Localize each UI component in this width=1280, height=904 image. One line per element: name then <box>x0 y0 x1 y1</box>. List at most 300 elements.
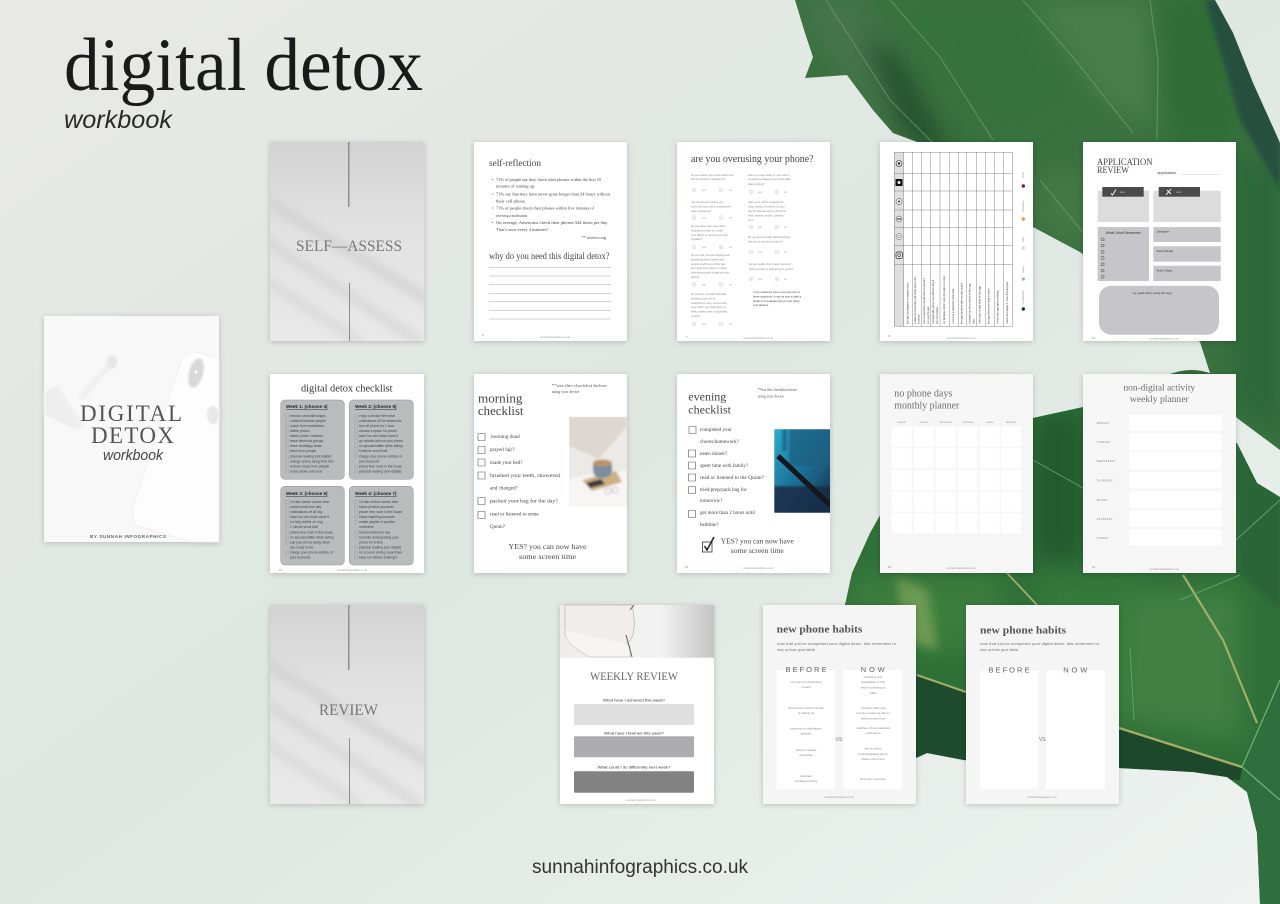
closing message: some screen time <box>519 552 577 561</box>
week 2 panel: charge your phone outside of <box>359 454 402 458</box>
questions left column: has the amount of time you <box>691 200 724 204</box>
obstacles box: Obstacles <box>1156 230 1170 234</box>
week 1 panel: leave facebook groups <box>290 439 324 443</box>
checklist items: completed your <box>700 427 732 433</box>
heading: no phone days <box>894 389 952 400</box>
option labels: yes <box>702 284 707 286</box>
application field: application <box>1157 170 1176 175</box>
footer: sunnahinfographics.co.uk <box>1027 795 1057 799</box>
questions left column: regularly? <box>691 237 703 241</box>
questions left column: interrupting other things you are <box>691 270 729 274</box>
panel: morning checklist page <box>474 374 632 573</box>
day labels: FRIDAY <box>1097 499 1108 502</box>
heading: morning <box>478 392 523 406</box>
week 3 panel <box>281 486 344 565</box>
heading: checklist <box>688 404 732 416</box>
now column: which is pleasing to <box>860 686 886 690</box>
questions left column: do you find yourself viewing and <box>691 253 730 257</box>
week 2 panel: 5-minute scroll limit <box>359 449 387 453</box>
panel: are you overusing your phone page <box>677 142 830 341</box>
week 4 panel: reminders <box>359 525 374 529</box>
checklist items: bedtime? <box>700 522 719 528</box>
day labels <box>897 421 1017 424</box>
panel: new phone habits filled <box>763 605 916 804</box>
week 4 panel: phone free room in the house <box>359 510 402 514</box>
now column: before screen time <box>861 716 885 720</box>
option labels: yes <box>702 323 707 326</box>
activity rows <box>1129 415 1222 546</box>
heading: WEEKLY REVIEW <box>590 669 679 683</box>
week 4 panel: consider downgrading your <box>359 536 399 540</box>
statistics list <box>492 177 611 240</box>
website footer: sunnahinfographics.co.uk <box>532 857 748 878</box>
questions right column: that you enter is obsessing its funds? <box>749 267 794 271</box>
week 4 panel: phone for a time <box>359 540 383 544</box>
page number: 10 <box>1092 336 1096 340</box>
now column: morning routine as well as <box>856 711 890 715</box>
footer: sunnahinfographics.co.uk <box>626 798 656 802</box>
panel: digital detox checklist page <box>270 374 424 573</box>
checklist items: packed your bag for the day? <box>490 498 559 504</box>
week 1 panel <box>281 400 344 479</box>
week 3 panel: social media free day <box>290 505 322 509</box>
advice note <box>753 290 802 307</box>
questions left column: checking your cell or <box>691 296 716 300</box>
option labels: no <box>729 246 732 249</box>
footer: sunnahinfographics.co.uk <box>1149 336 1179 340</box>
before column: unlimited <box>800 774 812 778</box>
question 3: What could I do differently next week? <box>598 766 671 770</box>
week 2 panel: physical reading (non-digital) <box>359 470 401 474</box>
now column: mindful to only <box>864 675 883 679</box>
heading: are you overusing your phone? <box>691 154 814 165</box>
question 1 <box>574 698 694 725</box>
week 3 panel: 1h ratio before screen time <box>290 500 329 504</box>
page number: 8 <box>888 334 890 338</box>
obstacles box <box>1153 227 1221 242</box>
icon: earbuds photo <box>45 355 117 430</box>
week 2 panel: your bedroom <box>359 460 380 464</box>
checkboxes <box>478 434 485 518</box>
week 2 panel: notifications off for weekends <box>359 419 402 423</box>
statement rows: it stops me connecting with those around me <box>914 276 917 324</box>
week 3 panel: notifications off all day <box>290 510 323 514</box>
week 2 panel: phone-free room in the house <box>359 464 402 468</box>
questions left column: your pillow, or next to your bed <box>691 233 728 237</box>
week 2 panel: no spouse/staffer while eating <box>359 444 403 448</box>
questions right column: place setting? <box>748 182 765 186</box>
option labels: no <box>784 226 787 229</box>
heading: evening <box>688 392 727 404</box>
before column <box>777 665 835 789</box>
panel: application review page <box>1083 142 1236 341</box>
week 4 panel: physical reading (non-digital) <box>359 546 401 550</box>
panel: self-reflection page <box>474 142 627 341</box>
checklist items: tomorrow? <box>700 498 723 504</box>
what I must remember box: What I Must Remember <box>1106 231 1142 235</box>
now column: areas in the home <box>861 757 885 761</box>
statement rows: i lose track of time while on this app <box>978 286 982 324</box>
option labels: yes <box>758 278 763 281</box>
start a break box <box>1153 246 1221 262</box>
statement rows: i struggle with going a day without using it <box>932 280 935 324</box>
week 2 panel: go outside without your phone <box>359 439 403 443</box>
footer: sunnahinfographics.co.uk <box>1149 567 1179 571</box>
statement rows: my behaviour when using this app is not ideal <box>943 275 946 324</box>
statement rows: this app interferes with my daily routine <box>960 282 964 324</box>
now column: notifications <box>865 731 881 735</box>
heading: SELF—ASSESS <box>296 238 402 255</box>
cover title: DIGITAL <box>80 401 182 426</box>
week 3 panel: 1 minute scroll limit <box>290 525 318 529</box>
checklist items <box>490 434 561 530</box>
checklist items: get more than 2 hours until <box>700 510 756 516</box>
panel: non-digital activity weekly planner <box>1083 374 1236 573</box>
closing message: YES? you can now have <box>508 542 587 551</box>
questions left column: even when you know there is <box>691 305 726 309</box>
versus label: VS <box>1039 737 1046 743</box>
intro text: keep up those good habits! <box>980 648 1018 652</box>
start a break box: Start a Break <box>1156 249 1173 253</box>
closing message <box>508 542 587 561</box>
heading: self-reflection <box>489 158 541 169</box>
now column <box>1046 666 1105 789</box>
questions left column: smartphone many times a day <box>691 301 728 305</box>
option labels: no <box>729 323 732 326</box>
questions left column: to see? <box>691 314 700 318</box>
questions right column: texts, tweets, emails, updates, <box>748 214 784 218</box>
cover credit: BY SUNNAH INFOGRAPHICS <box>90 534 166 539</box>
intro text: now that you've completed your digital detox, lets remember to <box>777 642 896 646</box>
before column: not scared of feel-testing <box>790 680 822 684</box>
day labels: SUNDAY <box>1097 537 1109 540</box>
week 3 panel: your bedroom <box>290 556 311 560</box>
checklist items: read or listened to some <box>490 512 539 518</box>
checklist items: read or listened to the Quran? <box>700 475 765 481</box>
photo: dried leaf <box>560 605 714 658</box>
photo: phone in blue light <box>774 429 830 513</box>
statement rows: i am not spending enough time on passions <box>923 277 926 324</box>
heading <box>688 392 732 416</box>
heading: new phone habits <box>980 625 1066 636</box>
week 2 panel: enjoy a device free meal <box>359 414 395 418</box>
questions right column: feel an intense urge to check for <box>748 209 786 213</box>
checklist items: tried/prep/pack bag for <box>700 486 747 493</box>
statistics list: 71% of people check their phones within five minutes of <box>496 206 595 210</box>
cons box: cons <box>1176 191 1182 194</box>
week 1 panel: block toxic people <box>290 449 316 453</box>
questions left column: emails at all hours of the day <box>691 262 726 266</box>
page number: 21 <box>1092 565 1096 569</box>
week 4 panel: follow positive accounts <box>359 505 394 509</box>
option labels: yes <box>758 226 763 229</box>
legend <box>1022 172 1025 311</box>
week 2 panel: Week 2: (choose 5) <box>355 404 397 409</box>
week 1 panel: physical reading (not digital) <box>290 454 331 458</box>
statistics list: On average, Americans check their phones 344 times per day. <box>496 220 608 226</box>
checklist items: Quran? <box>490 524 506 530</box>
panel: new phone habits blank <box>966 605 1119 804</box>
now column: switches off non-essential <box>856 726 890 730</box>
week 3 panel: no spouse/staffer while eating <box>290 536 334 540</box>
closing message: some screen time <box>731 547 784 555</box>
footer: sunnahinfographics.co.uk <box>946 566 976 570</box>
leaf: small tip above weekly planner <box>1165 370 1212 380</box>
legend: sometimes <box>1022 200 1025 212</box>
cover title <box>80 401 182 448</box>
questions right column: smartphone always part of the table <box>748 177 791 181</box>
before column: of waking up <box>798 711 815 715</box>
statement rows: i would be happier if i used this app less <box>1006 281 1009 324</box>
checklist items: made your bed? <box>490 460 523 466</box>
questions left column: been increasing? <box>691 209 712 213</box>
before column: content <box>801 685 811 689</box>
cover title: DETOX <box>91 423 174 448</box>
legend: never <box>1022 172 1025 178</box>
now column: watch/listen to that <box>861 680 885 684</box>
heading: weekly planner <box>1130 395 1189 405</box>
week 1 panel: Week 1: (choose 4) <box>286 404 328 409</box>
week 1 panel: unsub from newsletters <box>290 424 324 428</box>
goals box <box>1099 286 1219 335</box>
note: using your device <box>552 390 580 394</box>
action steps box: Action Steps <box>1156 268 1173 272</box>
subtitle: workbook <box>64 106 174 134</box>
checklist items: chores/homework? <box>700 439 739 445</box>
now column: zone/designated phone <box>858 752 888 756</box>
statement rows: and feel restless <box>936 306 939 324</box>
day labels: WEDNESDAY <box>1097 460 1116 463</box>
photo: coffee on bed <box>569 416 627 506</box>
day labels: WEDNESDAY <box>939 421 953 424</box>
pros box: pros <box>1120 190 1126 194</box>
checklist items <box>700 427 765 528</box>
footer: sunnahinfographics.co.uk <box>337 568 367 572</box>
calendar grid <box>892 427 1021 533</box>
page number: 20 <box>888 565 892 569</box>
option labels: yes <box>702 216 707 220</box>
week 4 panel: create playlist of positive <box>359 520 395 524</box>
day labels: THURSDAY <box>1097 480 1113 482</box>
week 1 panel: unfriend/unfollow people <box>290 419 326 423</box>
advice note: break or to evaluate how you are using <box>753 299 800 303</box>
now column: NOW <box>861 665 886 674</box>
icon: phone photo <box>132 352 219 542</box>
questions right column: when your cell or smartphone <box>748 200 784 204</box>
questions left column: do you text yourself habitually <box>691 292 727 296</box>
intro text <box>980 642 1099 652</box>
page number: 7 <box>686 335 688 339</box>
week 2 panel: turn off phone for 1 hour <box>359 424 395 428</box>
week 3 panel: have fun one-down-done it <box>290 515 329 519</box>
cover subtitle: workbook <box>103 447 164 464</box>
panel: evening checklist page <box>677 374 835 573</box>
week 1 panel: delete phone numbers <box>290 434 323 438</box>
legend: often <box>1022 236 1025 242</box>
footer: sunnahinfographics.co.uk <box>946 336 976 340</box>
questions left column: and night even when it means <box>691 266 727 270</box>
statement rows: this app affects my sleep or mood <box>988 288 990 324</box>
week 3 panel: phone free room in the house <box>290 530 333 534</box>
heading <box>894 389 960 411</box>
writing lines <box>489 267 611 319</box>
statement rows: i compare my life to others on this app <box>968 283 972 324</box>
questions left column: answering texts, tweets and <box>691 258 725 262</box>
week 2 panel: have fun one-down-done it <box>359 434 398 438</box>
option labels: no <box>729 216 732 220</box>
checklist items: and changed? <box>490 486 519 492</box>
questions right column <box>748 173 794 271</box>
statement rows <box>906 275 1009 324</box>
day labels: FRIDAY <box>986 421 994 424</box>
note <box>758 388 797 398</box>
before column: accessible <box>799 753 813 757</box>
week 4 panel: have fun without sharing it <box>359 556 397 560</box>
checklist items: prayed fajr? <box>490 446 515 453</box>
leaf: lower fiddle leaf <box>845 407 1280 904</box>
now column: complete dhikr and <box>861 706 886 710</box>
before column <box>980 666 1038 789</box>
now column: Everyone used less <box>860 777 886 781</box>
option labels: no <box>729 284 732 286</box>
heading: REVIEW <box>1097 165 1129 175</box>
leaf: upper fiddle leaf <box>795 0 1280 450</box>
footer: sunnahinfographics.co.uk <box>824 795 854 799</box>
statistics list: receiving a notification. <box>496 213 528 218</box>
page number: 16 <box>685 565 689 569</box>
before column: BEFORE <box>988 666 1030 674</box>
panel: weekly review page <box>560 605 714 804</box>
statistics list: • <box>492 192 494 196</box>
heading <box>478 392 524 418</box>
checklist items: eaten dinner? <box>700 451 728 457</box>
statistics list: That's once every 4 minutes! <box>496 227 548 232</box>
day labels: MONDAY <box>897 421 907 424</box>
day labels: MONDAY <box>1097 422 1110 425</box>
week 4 panel <box>349 486 413 565</box>
app icons <box>896 160 902 258</box>
statistics list: their cell phone. <box>496 198 526 204</box>
day labels <box>1097 422 1116 540</box>
before column: phone is always <box>796 748 817 752</box>
week 1 panel: remove uninstalled apps <box>290 414 326 418</box>
panel: no phone days monthly planner <box>880 374 1033 573</box>
legend: not applicable <box>1022 290 1025 305</box>
questions left column: doing? <box>691 275 700 279</box>
week 2 panel <box>349 400 413 479</box>
statement rows: i check this app without thinking <box>996 290 1000 324</box>
week 4 panel: social media free day <box>359 530 391 534</box>
week 3 panel: you come home <box>290 546 314 550</box>
pros box <box>1098 187 1149 222</box>
checklist items: spent time with family? <box>700 462 749 469</box>
questions right column: when you eat meals, is your cell or <box>748 173 789 177</box>
statement rows: in person <box>918 313 920 324</box>
questions left column <box>691 173 734 318</box>
questions right column: etc? <box>748 218 754 222</box>
heading: digital detox checklist <box>301 383 392 395</box>
question 2: What have I learned this week? <box>604 732 664 736</box>
note <box>552 384 607 394</box>
questions left column: smartphone kept on, under <box>691 228 723 232</box>
week 4 panel: Week 4: (choose 7) <box>355 491 397 496</box>
statement rows: often <box>972 318 976 324</box>
week 1 panel: delete photos <box>290 429 310 433</box>
application field <box>1157 170 1221 175</box>
action steps box <box>1153 266 1221 281</box>
panel: workbook cover <box>44 316 219 542</box>
advice note: these questions, it may be time to take a <box>753 294 802 298</box>
questions left column: first 5 minutes of waking up? <box>691 177 726 181</box>
now column: Allah <box>870 691 877 695</box>
heading <box>1123 384 1195 405</box>
heading <box>1097 157 1153 175</box>
closing message <box>721 538 794 555</box>
week 4 panel: follow inspiring accounts <box>359 515 395 519</box>
panel: habit tracker table page <box>880 142 1033 341</box>
footer: sunnahinfographics.co.uk <box>743 566 773 570</box>
questions right column: rings, beeps or buzzes, do you <box>748 204 785 208</box>
intro text <box>777 642 896 652</box>
statement rows: as i use this app <box>927 306 930 324</box>
option labels: yes <box>758 251 763 254</box>
day labels: TUESDAY <box>1097 441 1111 444</box>
week 3 panel: no help notifier on ring <box>290 520 323 524</box>
checkboxes <box>688 426 696 518</box>
page number: 6 <box>482 333 484 337</box>
question 3 <box>574 766 694 793</box>
option labels <box>702 189 787 326</box>
statistics list: 71% of people say they check their phones within the first 10 <box>496 177 601 182</box>
heading: non-digital activity <box>1123 384 1195 394</box>
note: using your device <box>758 394 784 398</box>
before column: BEFORE <box>786 665 826 674</box>
question 2 <box>574 732 694 757</box>
panel: review divider <box>260 605 440 805</box>
statistics list: minutes of waking up. <box>496 184 535 188</box>
week 2 panel: choose a space for phone <box>359 429 397 433</box>
intro text: keep up those good habits! <box>777 648 815 652</box>
statistics list: • <box>492 220 494 225</box>
question heading: why do you need this digital detox? <box>489 252 610 262</box>
cons box <box>1153 187 1221 222</box>
yes / no options <box>692 188 779 326</box>
icon: big checkbox <box>702 537 714 552</box>
heading: checklist <box>478 404 524 418</box>
statement rows: this app has triggered a negative mood <box>906 282 910 324</box>
table <box>894 152 1013 326</box>
option labels: no <box>729 189 732 192</box>
footer: sunnahinfographics.co.uk <box>540 335 570 339</box>
question 1: What have I achieved this week? <box>603 698 665 702</box>
week 3 panel: charge your phone outside of <box>290 550 333 554</box>
questions left column: likely nothing new or important <box>691 310 728 314</box>
versus label: VS <box>836 737 843 743</box>
now column: NOW <box>1063 666 1088 674</box>
heading: REVIEW <box>319 702 379 719</box>
title: digital detox <box>64 24 423 107</box>
week 1 panel: leave whatsapp chats <box>290 444 322 448</box>
statistics list: • <box>492 177 494 182</box>
closing message: YES? you can now have <box>721 538 794 546</box>
checklist items: morning duas! <box>491 434 521 440</box>
questions left column: do you check your phone within the <box>691 173 734 177</box>
option labels: no <box>784 251 787 254</box>
statistics list: 71% say that they have never gone longer than 24 hours without <box>496 192 611 196</box>
before column: responds to notifications <box>790 726 822 730</box>
footer: sunnahinfographics.co.uk <box>743 336 773 340</box>
now column <box>843 665 902 789</box>
